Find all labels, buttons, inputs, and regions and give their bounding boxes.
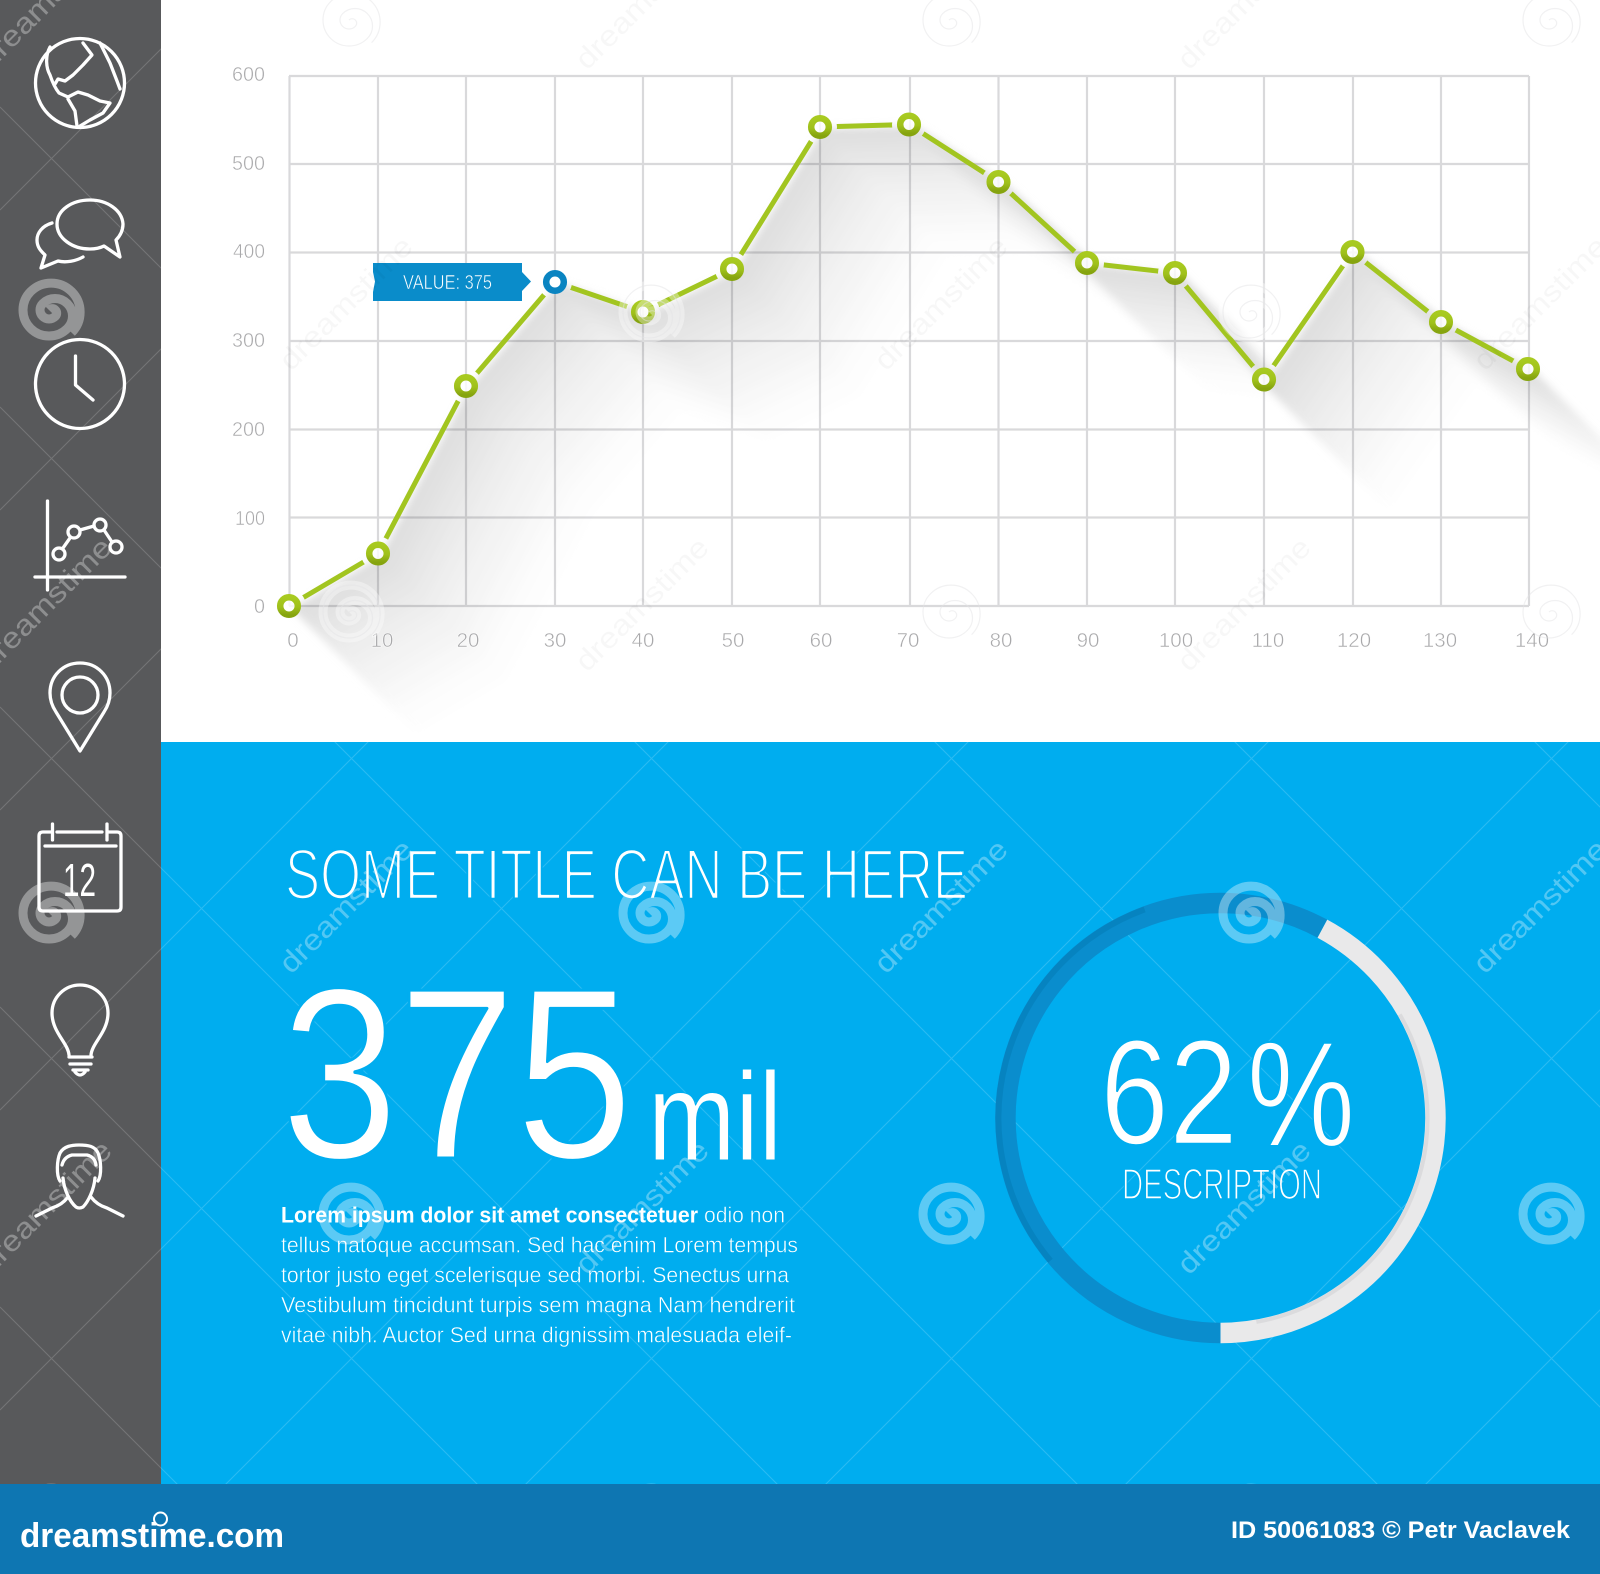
donut percent sign: % [1247,1010,1355,1178]
paragraph: odio non [704,1202,785,1228]
unit: mil [648,1048,782,1187]
panel: line chart [232,63,1600,738]
green data points [280,116,1537,615]
watermark spirals and text: dreamstime [569,1135,716,1281]
y axis labels: 500 [232,152,265,175]
tooltip: value 375: VALUE: 375 [403,272,492,294]
panel: sidebar [0,0,161,1484]
icon: clock [36,340,124,428]
x axis labels: 30 [544,629,566,652]
paragraph: tellus natoque accumsan. Sed hac enim Lorem tempus [281,1232,798,1258]
y axis labels: 300 [232,329,265,352]
paragraph: Lorem ipsum dolor sit amet consectetuer [281,1202,698,1228]
watermark spirals and text: dreamstime [1171,532,1318,678]
icon: globe [36,38,124,128]
x axis labels: 50 [722,629,744,652]
chart grid [289,76,1529,606]
x axis labels: 10 [371,629,393,652]
donut description: DESCRIPTION [1122,1160,1322,1209]
icon: light bulb [52,985,108,1075]
heading: SOME TITLE CAN BE HERE [285,836,968,915]
tooltip: value 375 [373,263,531,301]
x axis labels: 90 [1077,629,1099,652]
highlighted blue data point [546,273,564,291]
x axis labels: 60 [810,629,832,652]
paragraph: tortor justo eget scelerisque sed morbi. Senectus urna [281,1262,789,1288]
paragraph: vitae nibh. Auctor Sed urna dignissim malesuada eleif- [281,1322,792,1348]
footer logo text: dreamstime.com [20,1517,284,1555]
icon: line chart [35,501,125,590]
watermark spirals and text: dreamstime [569,532,716,678]
icon: chat bubbles [37,200,123,268]
sidebar background [0,0,161,1484]
panel: white chart background [161,0,1600,742]
x axis labels: 110 [1252,629,1284,652]
footer background [0,1484,1600,1574]
watermark spirals and text: dreamstime [273,834,420,980]
y axis labels: 0 [254,595,265,618]
footer credit: ID 50061083 © Petr Vaclavek [1231,1517,1571,1544]
donut chart 62 percent [998,903,1435,1333]
y axis labels: 200 [232,418,265,441]
watermark spirals and text: dreamstime [868,231,1015,377]
paragraph: Vestibulum tincidunt turpis sem magna Nam hendrerit [281,1292,796,1318]
watermark spirals and text: dreamstime [1467,231,1600,377]
x axis labels [287,629,1549,652]
watermark spirals and text: dreamstime [868,834,1015,980]
x axis labels: 100 [1159,629,1193,652]
x axis labels: 120 [1337,629,1371,652]
y axis labels: 100 [235,507,265,530]
green data line [289,124,1528,606]
icon: calendar: 12 [63,854,96,906]
footer logo spiral [154,1512,167,1526]
big number: 375 [281,937,633,1210]
watermark spirals and text: dreamstime [1171,1135,1318,1281]
x axis labels: 140 [1515,629,1549,652]
x axis labels: 20 [457,629,479,652]
long drop shadow under the line [295,130,1600,738]
donut value: 62 [1100,1008,1238,1176]
x axis labels: 0 [287,629,299,652]
footer bar [0,1484,1600,1574]
panel: blue summary [161,742,1600,1484]
watermark spirals and text: dreamstime [273,231,420,377]
x axis labels: 80 [990,629,1012,652]
icon: map pin [50,663,110,751]
icon: calendar [39,824,121,911]
x axis labels: 70 [897,629,919,652]
blue background [161,742,1600,1484]
watermark spirals and text: dreamstime [1467,834,1600,980]
y axis labels [232,63,265,618]
paragraph [281,1202,798,1348]
y axis labels: 600 [232,63,265,86]
icon: person [36,1145,123,1216]
y axis labels: 400 [233,240,265,263]
x axis labels: 130 [1423,629,1457,652]
x axis labels: 40 [632,629,654,652]
